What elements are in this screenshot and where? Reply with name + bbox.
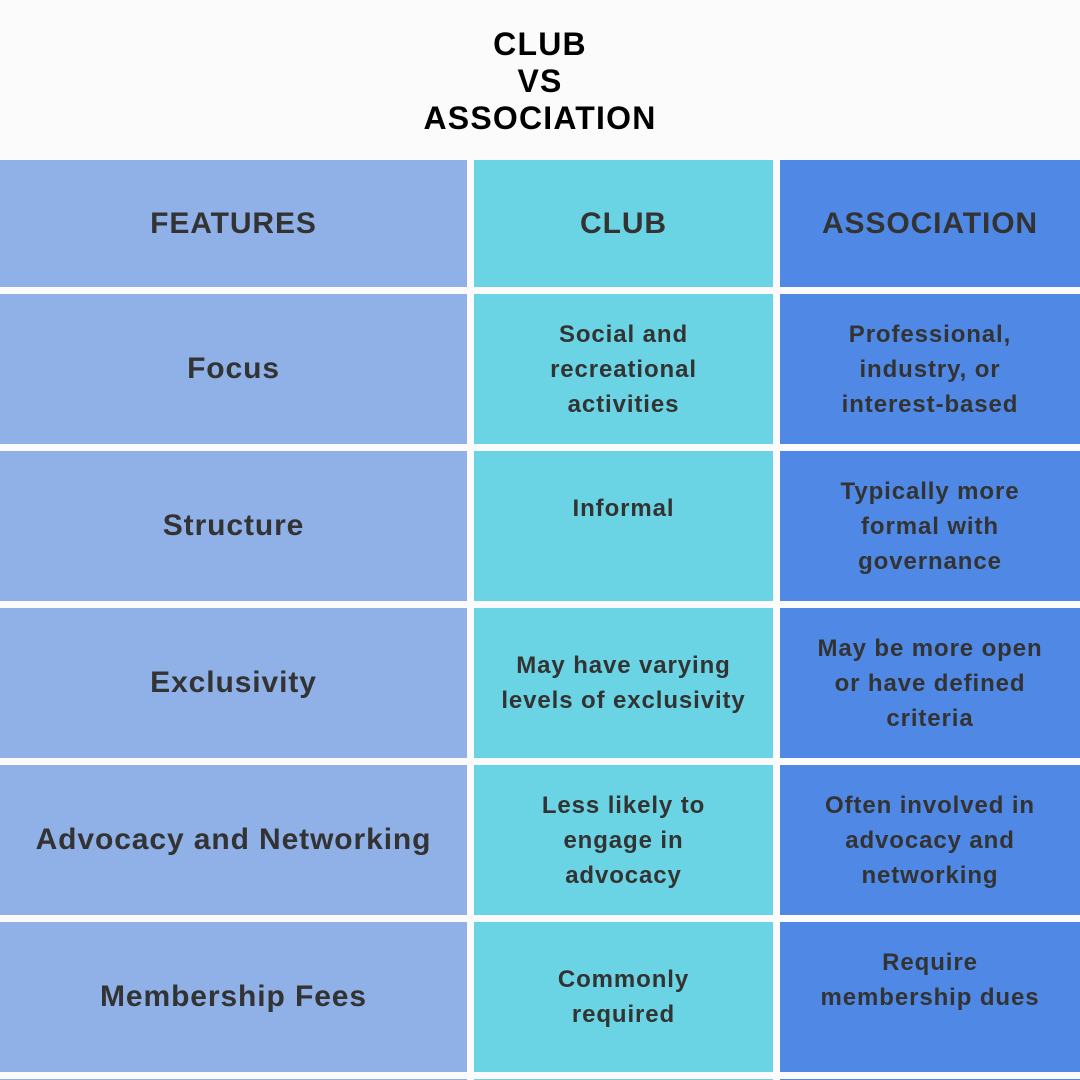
club: structure: Informal <box>573 495 674 522</box>
title <box>423 26 657 136</box>
title: CLUB <box>493 26 587 62</box>
row label: exclusivity: Exclusivity <box>150 666 317 699</box>
title: VS <box>517 63 563 99</box>
association: structure: Typically more <box>841 478 1019 504</box>
association: structure <box>780 451 1080 601</box>
association: fees <box>780 922 1080 1072</box>
association: advocacy: networking <box>861 862 998 888</box>
association: focus: industry, or <box>859 356 1001 382</box>
row label: focus <box>0 294 467 444</box>
row label: advocacy <box>0 765 467 915</box>
header: features: FEATURES <box>150 206 317 240</box>
association: exclusivity <box>780 608 1080 758</box>
row label: fees: Membership Fees <box>100 980 367 1013</box>
club: exclusivity: May have varying <box>516 652 731 679</box>
club: fees: required <box>572 1001 675 1028</box>
association: fees: Require <box>882 949 978 976</box>
header: association <box>780 160 1080 287</box>
club: advocacy <box>474 765 773 915</box>
association: focus: Professional, <box>849 320 1011 348</box>
title: ASSOCIATION <box>423 100 657 136</box>
row label: structure: Structure <box>163 509 304 542</box>
association: exclusivity: May be more open <box>817 634 1043 662</box>
association: structure: formal with <box>861 512 999 540</box>
row label: focus: Focus <box>187 352 280 385</box>
header: club <box>474 160 773 287</box>
row label: advocacy: Advocacy and Networking <box>36 823 431 856</box>
association: advocacy: advocacy and <box>845 826 1015 854</box>
club: focus <box>474 294 773 444</box>
club: focus: recreational <box>550 356 697 382</box>
association: exclusivity: or have defined <box>835 670 1025 696</box>
header: association: ASSOCIATION <box>822 207 1038 240</box>
club: structure <box>474 451 773 601</box>
association: focus: interest-based <box>842 390 1018 418</box>
association: advocacy <box>780 765 1080 915</box>
club: fees: Commonly <box>558 966 689 993</box>
association: advocacy: Often involved in <box>825 792 1035 818</box>
club: focus: activities <box>568 390 679 418</box>
club: exclusivity <box>474 608 773 758</box>
club: focus: Social and <box>559 320 688 348</box>
association: structure: governance <box>858 548 1002 574</box>
row label: fees <box>0 922 467 1072</box>
row label: structure <box>0 451 467 601</box>
header: features <box>0 160 467 287</box>
club: fees <box>474 922 773 1072</box>
club: advocacy: engage in <box>563 826 684 854</box>
row label: exclusivity <box>0 608 467 758</box>
next row strip <box>0 1079 1080 1080</box>
club: advocacy: advocacy <box>565 862 682 888</box>
association: fees: membership dues <box>821 984 1039 1011</box>
header: club: CLUB <box>580 207 667 240</box>
club: exclusivity: levels of exclusivity <box>501 687 746 714</box>
club: advocacy: Less likely to <box>542 792 705 818</box>
association: exclusivity: criteria <box>886 704 974 732</box>
association: focus <box>780 294 1080 444</box>
